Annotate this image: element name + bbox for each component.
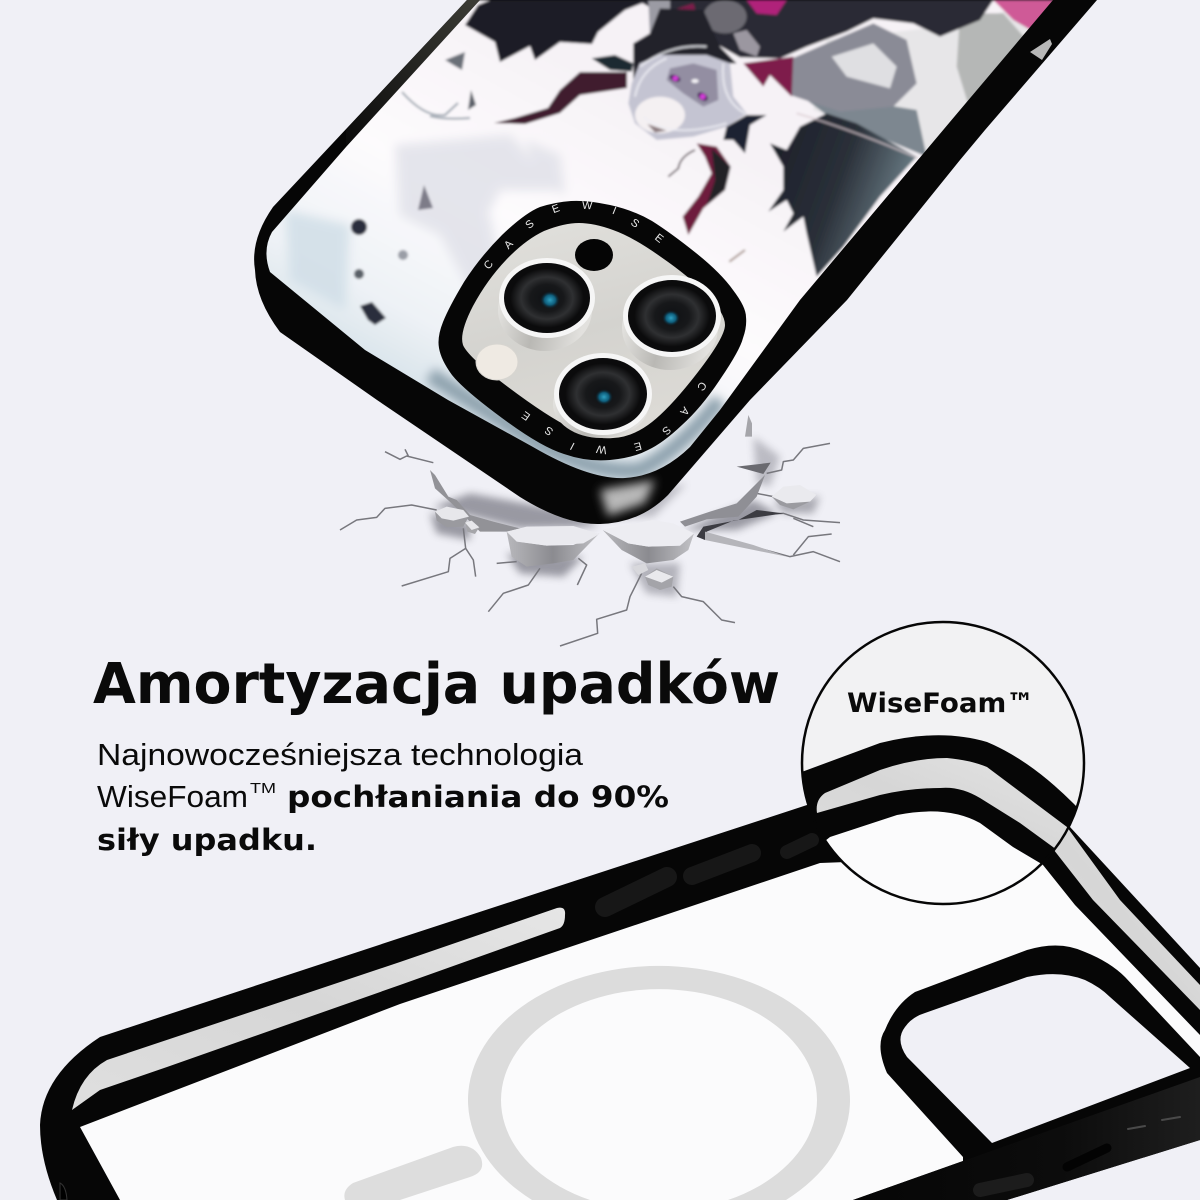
left horn xyxy=(494,72,627,124)
lower chips xyxy=(632,563,673,590)
bangs xyxy=(635,97,685,133)
cracked ground impact xyxy=(340,415,840,646)
brand text lower: E xyxy=(520,408,533,422)
crack shadows xyxy=(430,437,820,597)
lower band xyxy=(853,1077,1200,1200)
brand text upper: C xyxy=(482,258,496,272)
case body xyxy=(254,0,1097,524)
magnetic ring xyxy=(468,966,850,1200)
flash xyxy=(476,344,518,380)
lower horn xyxy=(683,143,731,235)
lens 2 xyxy=(622,275,721,370)
lens 3 xyxy=(553,353,652,438)
brand text upper xyxy=(482,200,665,272)
small left chips xyxy=(435,507,479,534)
brand text lower: A xyxy=(677,404,691,418)
antler xyxy=(402,92,470,119)
brand text lower: C xyxy=(694,379,709,393)
strand over wing xyxy=(797,113,918,158)
brand text upper: W xyxy=(582,200,593,212)
side buttons xyxy=(605,840,1180,1190)
left ledge xyxy=(430,470,520,532)
heading: Amortyzacja upadków xyxy=(93,652,780,717)
body text: WiseFoam xyxy=(97,779,248,814)
small dark debris xyxy=(351,52,476,325)
brand text upper: I xyxy=(610,205,618,217)
magnified corner xyxy=(804,735,1076,864)
magenta feathers xyxy=(676,2,696,12)
camera cut-out frame xyxy=(880,945,1200,1165)
forehead highlight xyxy=(691,79,699,83)
dark collar xyxy=(633,8,737,80)
left gap strip xyxy=(72,908,565,1110)
brand text upper: E xyxy=(652,232,665,246)
brand text lower xyxy=(520,379,709,456)
case frame xyxy=(40,790,1200,1200)
hole xyxy=(575,239,613,271)
right gap strip xyxy=(1050,827,1200,1010)
body text: siły upadku. xyxy=(97,823,317,857)
brand text lower: E xyxy=(633,439,643,453)
right chip xyxy=(772,485,817,509)
pale right area xyxy=(814,12,1028,150)
small brush mark xyxy=(729,250,745,262)
right wing xyxy=(768,113,917,277)
brand text lower: W xyxy=(595,442,608,456)
camera surround xyxy=(438,200,746,460)
artwork on back panel xyxy=(250,0,1070,490)
grey strands xyxy=(648,0,670,43)
clear phone case, back view xyxy=(40,790,1200,1200)
eyes xyxy=(669,73,681,83)
hair mass xyxy=(628,55,747,140)
hair strands xyxy=(635,46,745,130)
magnifier ring xyxy=(802,622,1084,904)
brand text upper: E xyxy=(550,202,561,216)
light reflection xyxy=(832,43,897,88)
brand text lower: S xyxy=(659,423,673,437)
horn tendril xyxy=(668,150,695,177)
upper right light grey xyxy=(957,13,1027,110)
camera black ring xyxy=(438,201,746,460)
right side: wing, body xyxy=(637,0,1055,277)
brand text upper: S xyxy=(523,218,537,232)
camera plate xyxy=(462,223,725,438)
neck dark fringe xyxy=(723,115,767,153)
pill mark xyxy=(344,1146,482,1200)
crack lines xyxy=(340,443,840,646)
side button xyxy=(1030,39,1052,60)
camera cut-out xyxy=(900,974,1190,1143)
mouth xyxy=(647,124,667,133)
body text: pochłaniania do 90% xyxy=(287,780,669,814)
torso dark xyxy=(637,0,993,58)
phone with case, artwork and camera xyxy=(250,0,1097,524)
brand text upper: S xyxy=(628,217,641,231)
bottom tint xyxy=(430,375,720,471)
face xyxy=(667,63,718,107)
body text xyxy=(97,737,669,857)
magnifier callout xyxy=(800,620,1086,906)
silver hair sweep xyxy=(773,23,917,112)
chest spheres xyxy=(703,0,747,33)
left wing xyxy=(465,0,650,62)
brand text upper: A xyxy=(502,238,516,252)
case left edge tone xyxy=(346,0,480,147)
case corner highlight xyxy=(600,480,655,516)
left port xyxy=(60,1183,67,1200)
center-left fragment xyxy=(507,526,599,567)
fog shapes xyxy=(285,135,565,310)
brand text lower: I xyxy=(568,440,577,452)
clear interior xyxy=(80,855,1200,1200)
brand text lower: S xyxy=(543,423,556,437)
pink upper right xyxy=(992,0,1053,30)
magnifier label: WiseFoam™ xyxy=(847,688,1034,719)
teal shadow feathers xyxy=(592,55,633,72)
center-right fragment xyxy=(603,520,694,563)
body text: Najnowocześniejsza technologia xyxy=(97,737,584,772)
grey backdrop xyxy=(808,100,926,156)
lens 1 xyxy=(498,258,595,351)
head and chest detail xyxy=(592,0,793,153)
body text: TM xyxy=(250,780,276,797)
right slab xyxy=(680,415,787,557)
